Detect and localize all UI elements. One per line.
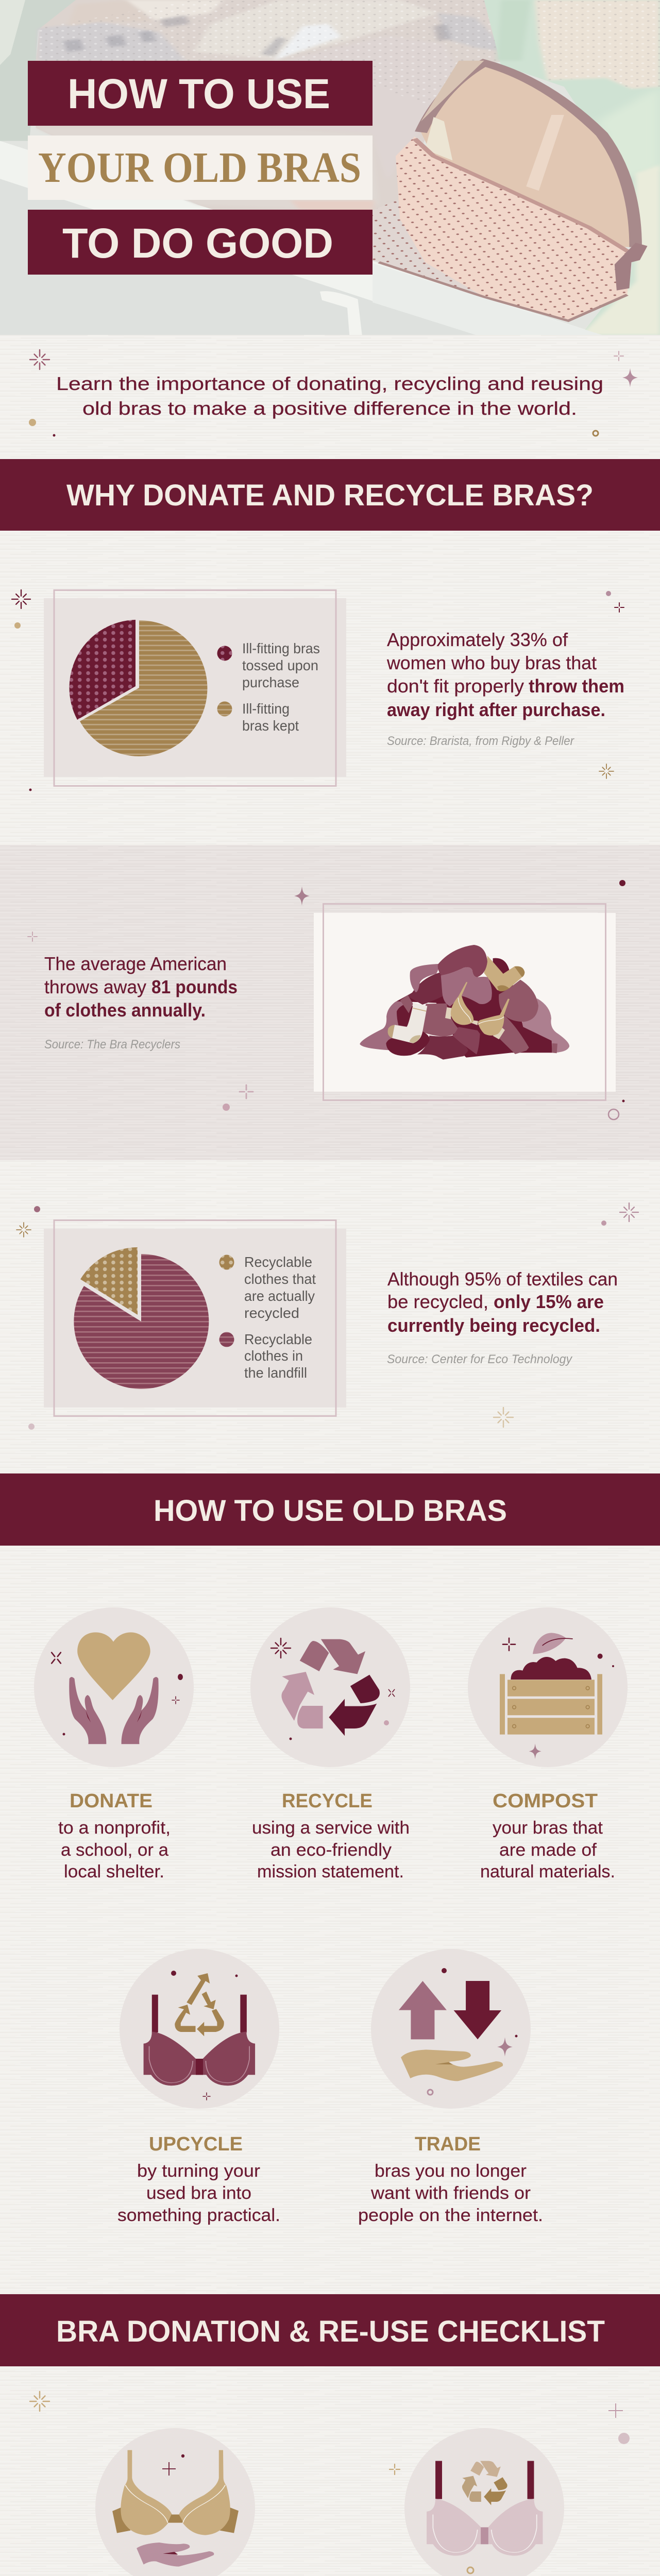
statistic text: 33 percent of women: away right after purchase.: [387, 699, 605, 720]
text: recycle: RECYCLE: [282, 1790, 373, 1812]
section banner: how to use old bras: [0, 1473, 660, 1546]
statistic text: 15 percent recycled: currently being recycled.: [387, 1315, 600, 1336]
legend: actually recycled: clothes that: [244, 1271, 316, 1287]
statistic text: 33 percent of women: Source: Brarista, from Rigby & Peller: [387, 734, 574, 748]
section banner: why donate and recycle bras: WHY DONATE AND RECYCLE BRAS?: [66, 479, 594, 512]
section banner: bra donation and re-use checklist: BRA DONATION & RE-USE CHECKLIST: [56, 2315, 605, 2348]
panel: ill-fitting bras pie chart: [44, 590, 346, 786]
text: trade: want with friends or: [370, 2183, 531, 2203]
tinted band behind second statistic: [0, 845, 660, 1160]
text: upcycle: [117, 2133, 280, 2225]
legend: ill-fitting bras tossed: tossed upon: [242, 657, 318, 673]
text: donate: [58, 1790, 171, 1882]
pie chart: ill-fitting bras: [70, 620, 207, 756]
text: donate: to a nonprofit,: [58, 1818, 171, 1838]
title bar: to do good: TO DO GOOD: [62, 220, 333, 267]
legend: ill-fitting bras kept: Ill-fitting: [242, 701, 290, 717]
option: upcycle: [120, 1949, 279, 2109]
checklist sparkles: [14, 2392, 643, 2576]
text: upcycle: used bra into: [146, 2183, 251, 2203]
text: trade: [358, 2133, 543, 2225]
statistic text: 33 percent of women: don't fit properly: [387, 675, 524, 697]
text: recycle: an eco-friendly: [270, 1840, 392, 1860]
legend: ill-fitting bras tossed: purchase: [242, 674, 299, 690]
option: recycle: [250, 1607, 410, 1767]
text: donate: DONATE: [70, 1790, 153, 1812]
icon: compost crate: [500, 1633, 614, 1759]
statistic text: 81 pounds of clothes: The average American: [44, 953, 227, 974]
hero photo: drawer of old bras: [0, 0, 660, 335]
legend: in the landfill: clothes in: [244, 1348, 303, 1364]
statistic text: 81 pounds of clothes: [44, 953, 238, 1052]
statistic text: 33 percent of women: throw them: [529, 675, 624, 697]
text: recycle: mission statement.: [257, 1862, 404, 1882]
statistic text: 33 percent of women: Approximately 33% of: [387, 629, 568, 650]
section 3 sparkles: [16, 1203, 638, 1430]
legend: in the landfill: [219, 1331, 312, 1381]
text: donate: local shelter.: [64, 1862, 164, 1882]
intro text: old bras to make a positive difference in the world.: [82, 398, 577, 419]
text: upcycle: by turning your: [137, 2161, 260, 2181]
text: trade: bras you no longer: [375, 2161, 527, 2181]
statistic text: 15 percent recycled: Source: Center for Eco Technology: [387, 1352, 573, 1366]
legend: ill-fitting bras kept: [217, 701, 299, 734]
section 2 sparkles: [28, 880, 625, 1120]
legend: ill-fitting bras tossed: Ill-fitting bras: [242, 640, 320, 656]
title bar: your old bras: [28, 135, 373, 200]
statistic text: 81 pounds of clothes: 81 pounds: [151, 976, 238, 997]
text: trade: people on the internet.: [358, 2206, 543, 2225]
text: donate: a school, or a: [61, 1840, 168, 1860]
text: upcycle: UPCYCLE: [149, 2133, 243, 2155]
statistic text: 15 percent recycled: be recycled,: [387, 1291, 488, 1312]
intro text: Learn the importance of donating, recycling and reusing: [56, 373, 603, 394]
section 1 sparkles: [12, 590, 624, 791]
legend: ill-fitting bras tossed: [217, 640, 320, 690]
title bar: how to use: HOW TO USE: [67, 71, 330, 117]
text: compost: COMPOST: [493, 1790, 598, 1812]
text: recycle: [252, 1790, 410, 1882]
legend: ill-fitting bras kept: bras kept: [242, 718, 299, 734]
statistic text: 33 percent of women: [386, 629, 624, 748]
pie chart: recyclable clothes: [74, 1247, 209, 1389]
statistic text: 15 percent recycled: Although 95% of textiles can: [387, 1268, 618, 1290]
statistic text: 33 percent of women: women who buy bras that: [386, 652, 597, 673]
legend: actually recycled: recycled: [244, 1305, 299, 1321]
legend: actually recycled: [219, 1254, 316, 1321]
statistic text: 81 pounds of clothes: throws away: [44, 976, 146, 997]
panel: recyclable clothes pie chart: [44, 1220, 346, 1416]
text: compost: natural materials.: [480, 1862, 615, 1882]
legend: in the landfill: the landfill: [244, 1365, 307, 1381]
icon: pile of clothes: [360, 945, 569, 1060]
legend: actually recycled: are actually: [244, 1288, 315, 1304]
statistic text: 81 pounds of clothes: of clothes annually.: [44, 999, 206, 1021]
text: compost: your bras that: [493, 1818, 603, 1838]
text: compost: [480, 1790, 615, 1882]
legend: actually recycled: Recyclable: [244, 1254, 312, 1270]
statistic text: 15 percent recycled: [387, 1268, 618, 1366]
icon: bra with recycle triangle: [144, 1973, 255, 2086]
option: donate: [34, 1607, 194, 1767]
title bar: your old bras: YOUR OLD BRAS: [38, 144, 361, 192]
text: upcycle: something practical.: [117, 2206, 280, 2225]
text: trade: TRADE: [415, 2133, 481, 2155]
intro text: [56, 373, 603, 419]
icon: heart in hands: [69, 1632, 159, 1744]
section banner: why donate and recycle bras: [0, 459, 660, 531]
text: recycle: using a service with: [252, 1818, 410, 1838]
statistic text: 81 pounds of clothes: Source: The Bra Recyclers: [44, 1038, 180, 1052]
option: trade: [371, 1949, 531, 2109]
icon: trade arrows over hand: [399, 1981, 503, 2081]
section banner: how to use old bras: HOW TO USE OLD BRAS: [154, 1494, 507, 1528]
checklist icon: donate bra: [95, 2428, 255, 2576]
option: compost: [468, 1607, 628, 1767]
intro sparkles: [29, 350, 638, 437]
checklist icon: recycle bra: [404, 2428, 564, 2576]
legend: in the landfill: Recyclable: [244, 1331, 312, 1347]
title bar: how to use: [28, 61, 373, 126]
title bar: to do good: [28, 210, 373, 275]
text: compost: are made of: [499, 1840, 597, 1860]
icon: recycle arrows: [281, 1639, 380, 1736]
statistic text: 15 percent recycled: only 15% are: [494, 1291, 604, 1312]
section banner: bra donation and re-use checklist: [0, 2294, 660, 2366]
panel: clothes pile illustration: [314, 904, 616, 1100]
